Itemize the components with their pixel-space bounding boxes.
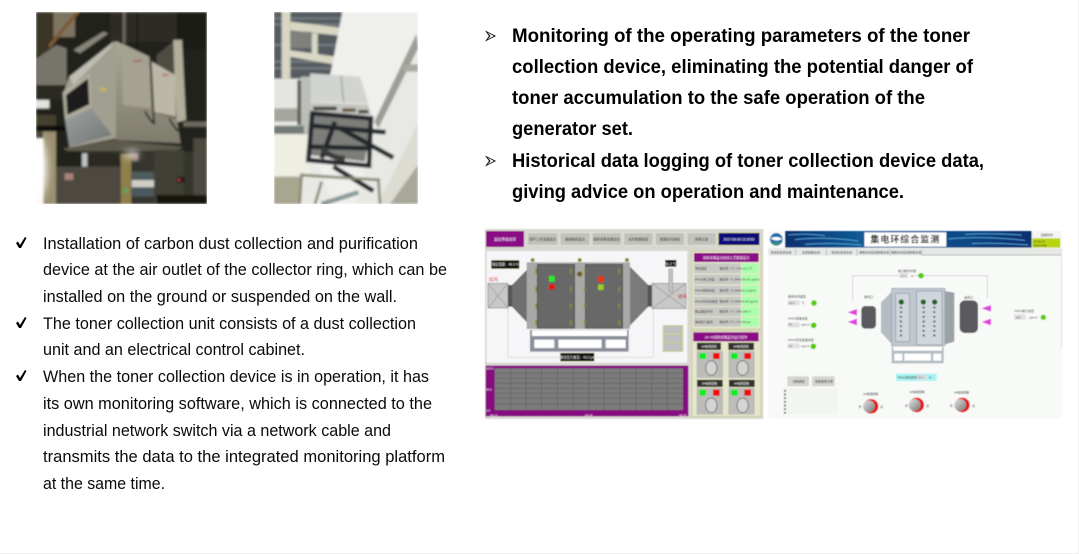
- left readings: 16.5: [789, 301, 795, 305]
- trend chart: 0.0: [486, 409, 490, 413]
- process parameter table: 碳粉收集监测在线工艺数据显示: [703, 255, 750, 260]
- process parameter table: 41.2 ℃: [743, 266, 752, 270]
- fan control panel: 2#电场控制: [733, 344, 749, 349]
- tab bar: 监控励磁系统: [802, 249, 820, 254]
- text block: installation notes: its own monitoring software, which is connected to the: [43, 395, 432, 413]
- text block: monitoring benefits: [485, 26, 984, 203]
- text block: monitoring benefits: Monitoring of the operating parameters of the toner: [512, 26, 971, 47]
- efficiency readout: 92.4: [918, 376, 924, 380]
- navigation bar: 燃环工作温度监控: [529, 236, 557, 241]
- left readings: PM10基础浓度: [788, 315, 808, 320]
- fan control panel: 4#电场控制: [734, 381, 749, 386]
- tab bar: [768, 248, 1061, 256]
- process parameter table: 0.45 ug/m3: [743, 299, 758, 303]
- arrow bullet 2: [485, 156, 496, 166]
- text block: installation notes: industrial network switch via a network cable and: [43, 422, 391, 440]
- control buttons: [783, 376, 838, 414]
- process parameter table: 50 psi: [743, 320, 751, 324]
- motor status knobs: 关: [880, 404, 883, 409]
- motor status knobs: 2#电场控制: [909, 389, 925, 394]
- fan control panel: 1#~4#碳粉收集监测运行操作: [705, 334, 748, 339]
- left readings: ug/m3: [801, 344, 810, 348]
- tab bar: 发电机监控系统: [831, 249, 852, 254]
- process parameter table: PM10排口浓度: [695, 277, 715, 282]
- navigation bar: [486, 231, 760, 247]
- check bullet 1: [16, 237, 26, 248]
- fan control panel: 1#电场控制: [701, 344, 717, 349]
- clock panel: [1032, 231, 1061, 248]
- navigation bar: 碳刷图纸监控: [565, 236, 586, 241]
- device diagram: [848, 268, 991, 363]
- right reading: [1014, 308, 1046, 320]
- efficiency readout: PM10净化效率: [898, 374, 917, 379]
- trend chart: 50.0: [486, 388, 492, 392]
- screenshot: monitoring software: [485, 229, 763, 419]
- navigation bar: 故障记录: [695, 236, 709, 241]
- process parameter table: 数采号: TI_PM01: [720, 277, 743, 282]
- text block: installation notes: at the same time.: [43, 475, 165, 493]
- arrow bullet 1: [485, 30, 496, 42]
- device diagram: [487, 251, 688, 363]
- clock panel: 15:02:25: [1033, 239, 1045, 243]
- process parameter table: 数采号: TI_PM02: [720, 288, 743, 293]
- process parameter table: 0.2 ug/m3: [743, 289, 756, 293]
- process parameter table: PM10环境基准值: [695, 298, 718, 303]
- text block: installation notes: The toner collection unit consists of a dust collection: [43, 315, 416, 333]
- navigation bar: 2017-08-08 13:18:50: [724, 237, 755, 241]
- device diagram: lx: [911, 274, 914, 278]
- process parameter table: 数采号: TT_7701: [720, 265, 743, 270]
- process parameter table: 90.25 ug/m3: [743, 278, 760, 282]
- navigation bar: 碳粉收集装置监控: [593, 236, 621, 241]
- text block: monitoring benefits: collection device, eliminating the potential danger of: [512, 57, 974, 78]
- text block: installation notes: [16, 235, 447, 493]
- left readings: 输煤水风温度: [788, 293, 806, 298]
- control buttons: 查看报警记录: [815, 379, 833, 384]
- motor status knobs: 关: [972, 403, 975, 408]
- trend chart: 08:18: [585, 413, 593, 417]
- trend chart: 100.0: [486, 367, 494, 371]
- motor status knobs: 开: [858, 405, 861, 409]
- process parameter table: [692, 251, 761, 329]
- trend chart: [486, 366, 688, 417]
- motor status knobs: [858, 389, 975, 414]
- device diagram: 相应湿度：48.3 %: [492, 262, 519, 267]
- photo: floor-mounted dust collection unit: [29, 12, 207, 204]
- clock panel: 2021/4/28: [1033, 244, 1047, 248]
- process parameter table: 排风温度: [695, 265, 707, 270]
- motor status knobs: 1#电场控制: [863, 391, 878, 396]
- device diagram: 进风口: [964, 294, 973, 299]
- process parameter table: 差动压力差压: [695, 319, 713, 324]
- device diagram: 排风口: [864, 294, 873, 299]
- device diagram: 差动压力差压：43.2 psi: [560, 354, 595, 359]
- process parameter table: 数采号: PT_7701: [720, 319, 743, 324]
- motor status knobs: 关: [926, 403, 929, 408]
- left readings: 15: [789, 323, 792, 327]
- control buttons: 清除报警: [793, 379, 805, 384]
- device diagram: 进风: [678, 293, 688, 300]
- trend chart: 08:13: [490, 413, 498, 417]
- right reading: 290: [1016, 315, 1021, 319]
- tab bar: 碳刷在线监测数据系统: [891, 249, 921, 254]
- text block: installation notes: When the toner collection device is in operation, it has: [43, 368, 429, 386]
- navigation bar: 实时数据报表: [628, 236, 649, 241]
- text block: monitoring benefits: toner accumulation to the safe operation of the: [512, 88, 925, 109]
- navigation bar: 数据实时曲线: [660, 236, 681, 241]
- right reading: ug/m3: [1029, 316, 1038, 320]
- left readings: ug/m3: [801, 323, 810, 327]
- left readings: [788, 293, 817, 349]
- text block: installation notes: unit and an electrical control cabinet.: [43, 341, 305, 359]
- text block: installation notes: transmits the data to the integrated monitoring platform: [43, 448, 445, 466]
- motor status knobs: 开: [905, 404, 908, 408]
- efficiency readout: %: [929, 376, 932, 380]
- motor status knobs: 3#电场控制: [954, 389, 969, 394]
- title banner: [785, 231, 1032, 248]
- device diagram: 电力柜内光强: [898, 268, 916, 273]
- check bullet 3: [16, 370, 26, 381]
- text block: monitoring benefits: Historical data logging of toner collection device data,: [512, 151, 984, 172]
- text block: monitoring benefits: giving advice on operation and maintenance.: [512, 182, 904, 203]
- process parameter table: 数采号: TI_PM03: [720, 298, 743, 303]
- tab bar: 碳刷在线监测数据系统: [859, 249, 889, 254]
- process parameter table: PM10排放浓度: [695, 288, 715, 293]
- process parameter table: 数采号: TT_7901: [720, 309, 743, 314]
- tab bar: 发电机监控系统: [771, 249, 791, 254]
- left readings: 10: [789, 344, 792, 348]
- text block: monitoring benefits: generator set.: [512, 119, 633, 140]
- process parameter table: 100 H: [743, 310, 751, 314]
- fan control panel: 3#电场控制: [702, 381, 717, 386]
- motor status knobs: 开: [950, 404, 953, 408]
- trend chart: 08:23: [679, 413, 687, 417]
- text block: installation notes: Installation of carbon dust collection and purification: [43, 235, 418, 253]
- fan control panel: [692, 331, 761, 416]
- photo: wall-mounted dust collection unit: [274, 12, 418, 204]
- text block: installation notes: device at the air outlet of the collector ring, which can be: [43, 261, 447, 279]
- screenshot: integrated monitoring platform: [768, 231, 1062, 419]
- navigation bar: 监控界面选择: [494, 237, 516, 242]
- efficiency readout: [896, 374, 937, 381]
- right reading: PM10排口浓度: [1014, 308, 1034, 313]
- device diagram: 出风: [489, 276, 498, 283]
- check bullet 2: [16, 317, 26, 328]
- left readings: PM10环境基础浓度: [788, 337, 814, 342]
- title banner: 集电环综合监测: [870, 233, 940, 244]
- device diagram: 21.2: [901, 274, 907, 278]
- logo: [770, 233, 783, 246]
- device diagram: 41.2 ℃: [665, 262, 677, 266]
- process parameter table: 除尘器运行时: [695, 309, 713, 314]
- text block: installation notes: installed on the ground or suspended on the wall.: [43, 288, 397, 306]
- left readings: ℃: [802, 301, 805, 305]
- clock panel: 当前时间: [1041, 232, 1053, 237]
